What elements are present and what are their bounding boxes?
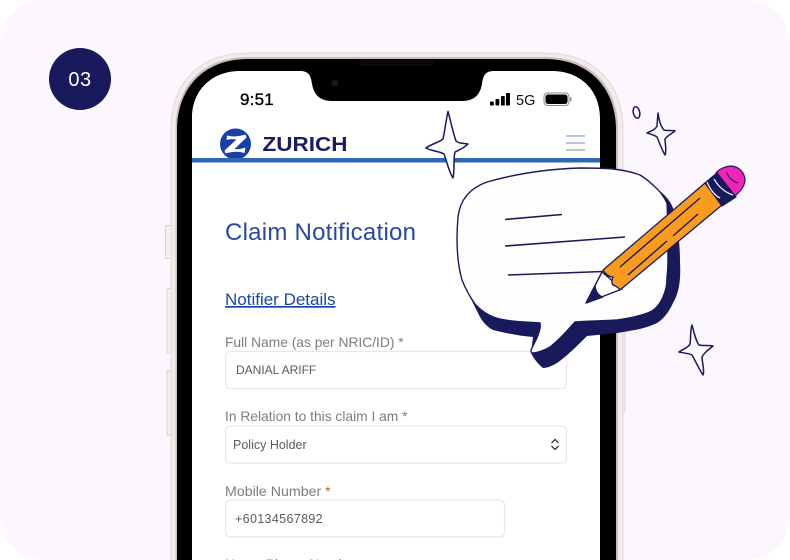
sparkle: small oval — [632, 106, 641, 119]
sparkle: bottom right — [679, 325, 713, 375]
ferrule highlights — [707, 179, 733, 198]
pencil icon — [586, 166, 745, 303]
pencil eraser — [716, 166, 745, 196]
signal icon — [490, 93, 510, 106]
speech bubble illustration — [457, 168, 680, 368]
speaker — [360, 60, 433, 65]
field: full name: DANIAL ARIFF — [236, 363, 316, 377]
phone frame inner edge — [176, 57, 618, 560]
field: mobile number: Mobile Number * — [225, 484, 331, 500]
written lines — [505, 214, 625, 275]
eraser crease — [727, 172, 738, 183]
bubble — [457, 168, 668, 353]
phone mockup — [166, 53, 625, 560]
step badge: 03: 03 — [68, 69, 92, 91]
sparkle: on phone — [426, 112, 468, 178]
field: relation to claim: In Relation to this claim I am * — [225, 409, 408, 424]
pencil tip — [586, 272, 622, 303]
field: full name: Full Name (as per NRIC/ID) * — [225, 335, 404, 350]
phone bezel — [177, 59, 616, 560]
phone side buttons — [166, 226, 625, 436]
zurich logo: ZURICH — [262, 134, 348, 156]
status time: 9:51 — [240, 90, 274, 109]
phone screen — [192, 71, 600, 560]
pencil ferrule — [705, 173, 736, 206]
pencil grooves — [620, 198, 700, 275]
zurich logo — [220, 128, 348, 160]
pencil body — [603, 183, 722, 290]
field: relation to claim: Policy Holder — [233, 438, 307, 452]
phone frame — [171, 53, 623, 560]
battery icon — [544, 93, 572, 106]
step badge: 03 — [49, 48, 111, 110]
field: mobile number — [225, 484, 504, 537]
network label: 5G — [516, 93, 535, 109]
bubble shadow — [470, 187, 680, 368]
field: mobile number: +60134567892 — [235, 512, 323, 526]
page heading: Claim Notification — [225, 219, 416, 246]
header rule — [192, 158, 600, 162]
sparkle: top right — [647, 113, 675, 155]
section link: Notifier Details — [225, 290, 336, 309]
camera — [332, 80, 338, 86]
field: relation to claim — [225, 409, 566, 463]
field: full name — [225, 335, 566, 388]
pencil lead — [586, 286, 603, 303]
hamburger menu — [566, 136, 585, 150]
